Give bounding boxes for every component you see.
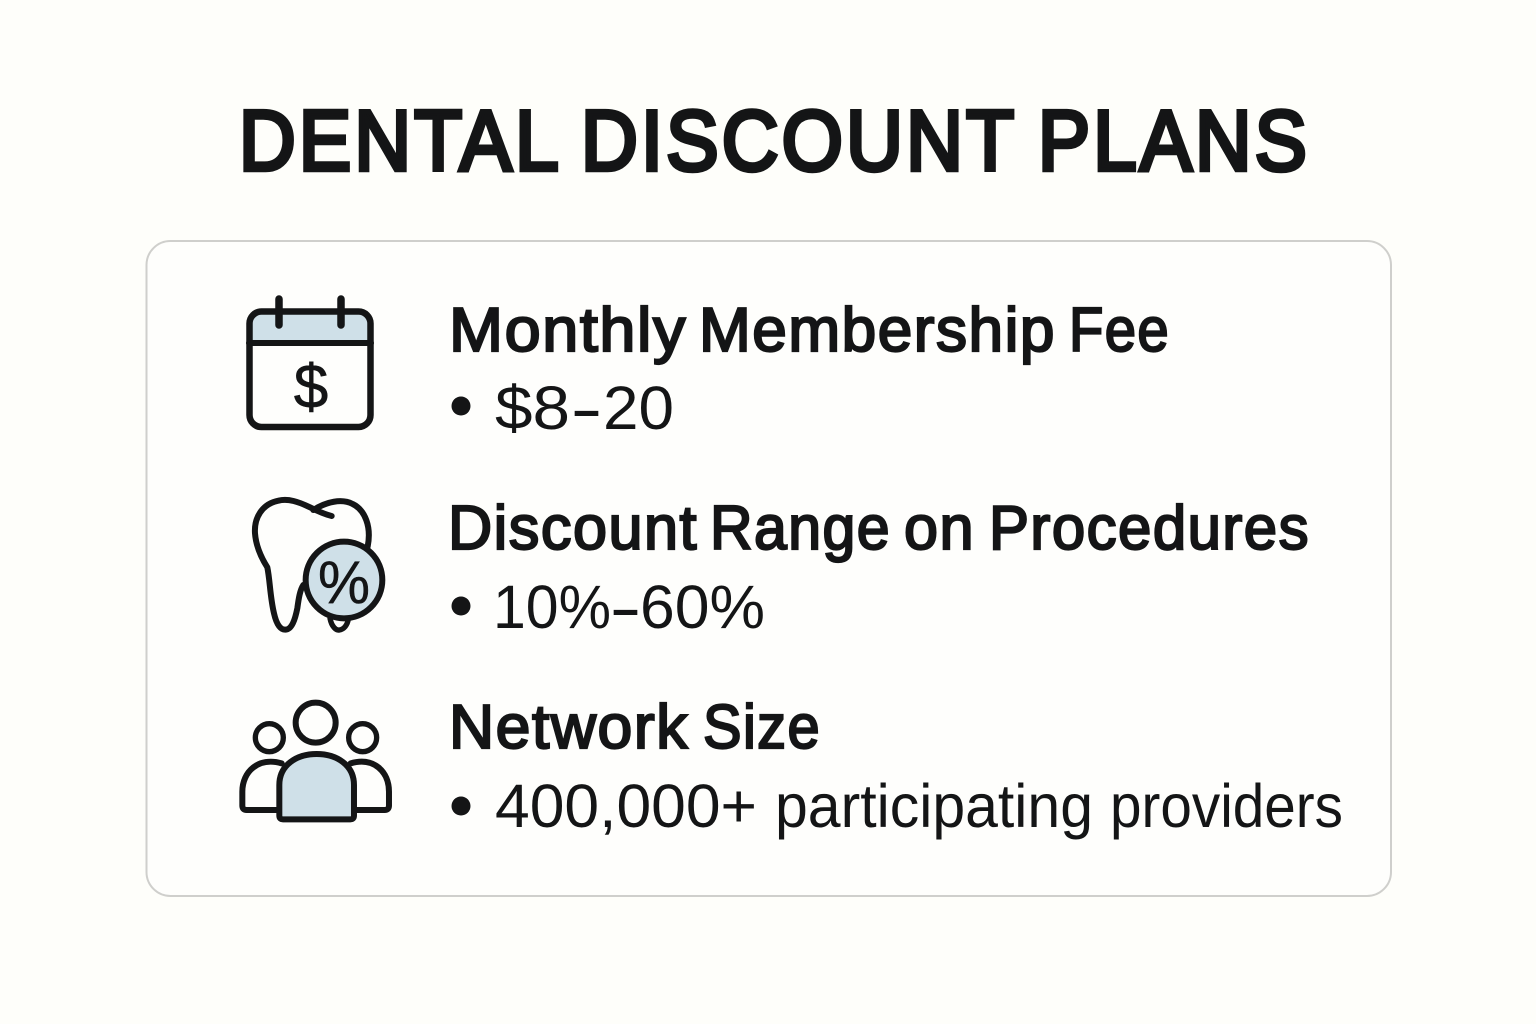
value: provider count: providers <box>1110 772 1343 840</box>
value: provider count: participating <box>775 772 1093 840</box>
bullet <box>452 596 470 616</box>
title: DENTAL <box>239 94 559 189</box>
heading: network size: Size <box>703 693 821 762</box>
value: fee range: 20 <box>603 374 674 442</box>
icon: group of people <box>242 703 389 819</box>
icon: calendar with dollar sign <box>249 299 371 427</box>
value: fee range: – <box>575 374 598 442</box>
row: network size <box>242 693 1343 840</box>
bullet <box>452 396 470 416</box>
row: monthly membership fee <box>249 296 1170 442</box>
icon: tooth with percent badge: % <box>318 549 370 616</box>
icon: calendar with dollar sign: $ <box>294 353 328 422</box>
title: DISCOUNT <box>581 94 1016 189</box>
heading: discount range on procedures: Procedures <box>989 494 1310 563</box>
icon: tooth with percent badge <box>255 500 382 630</box>
heading: discount range on procedures: Range <box>710 494 891 563</box>
value: provider count: 400,000+ <box>495 772 757 840</box>
row: discount range <box>255 494 1310 641</box>
heading: discount range on procedures: on <box>904 494 975 563</box>
value: discount range: 60% <box>640 573 765 641</box>
heading: discount range on procedures: Discount <box>448 494 698 563</box>
bullet <box>452 796 470 816</box>
heading: monthly membership fee: Monthly <box>449 296 687 365</box>
value: discount range: – <box>614 573 637 641</box>
title: PLANS <box>1038 94 1310 189</box>
heading: network size: Network <box>449 693 689 762</box>
heading: monthly membership fee: Fee <box>1069 296 1170 365</box>
heading: monthly membership fee: Membership <box>699 296 1056 365</box>
value: discount range: 10% <box>493 573 611 641</box>
value: fee range: $8 <box>495 374 570 442</box>
panel: plan details card <box>146 241 1391 896</box>
